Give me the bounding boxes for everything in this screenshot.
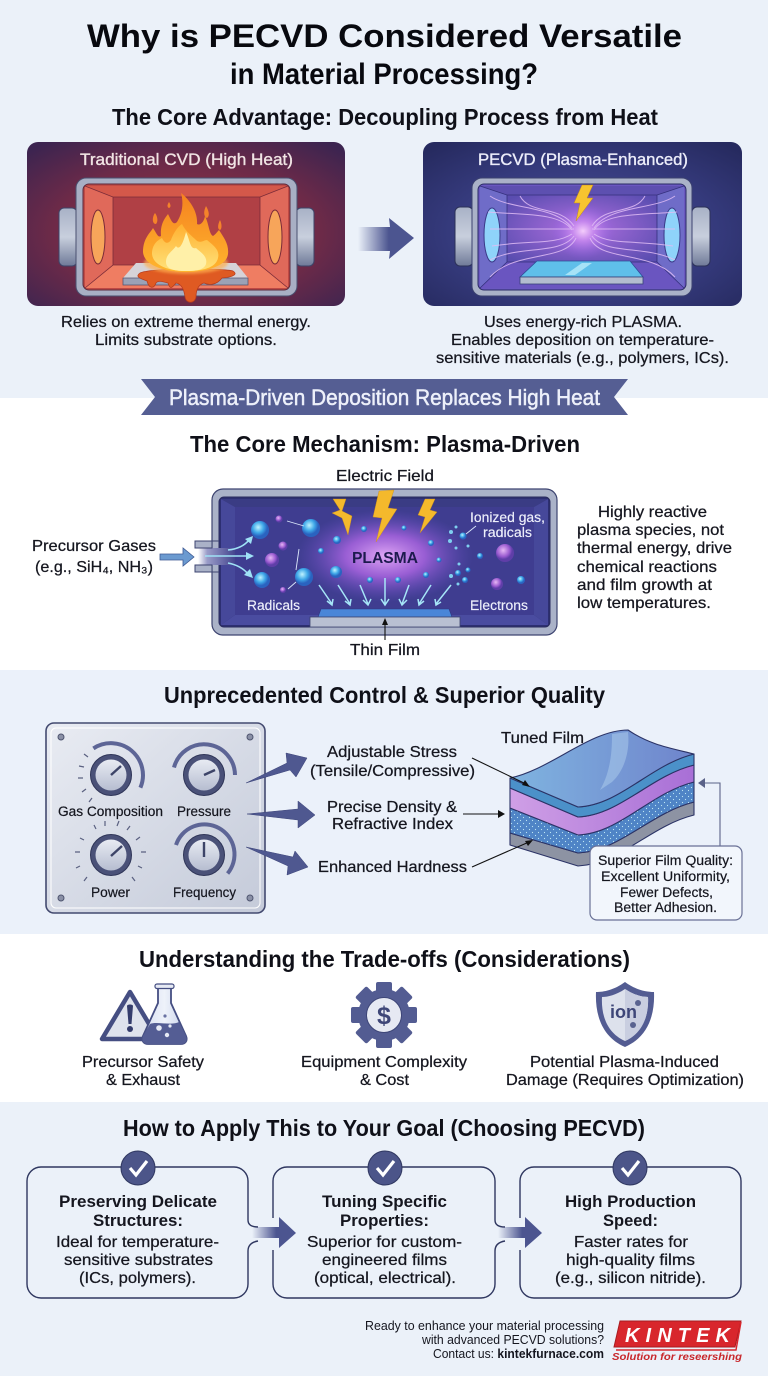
trade-off labels: Precursor Safety bbox=[82, 1054, 204, 1071]
particles bbox=[251, 516, 525, 593]
trade-off labels: & Exhaust bbox=[106, 1072, 181, 1089]
label: tuned film: Tuned Film bbox=[501, 730, 584, 747]
callout: superior film quality bbox=[590, 778, 742, 920]
heading: core mechanism: The Core Mechanism: Plasma-Driven bbox=[190, 431, 580, 457]
card: tuning specific properties: engineered films bbox=[322, 1252, 447, 1269]
footer contact text: Ready to enhance your material processing bbox=[365, 1319, 604, 1333]
text block: plasma species: Highly reactive bbox=[598, 504, 707, 521]
card: high production speed: (e.g., silicon nitride). bbox=[555, 1270, 706, 1287]
knob labels: Power bbox=[91, 885, 131, 900]
inlet opening and pipes bbox=[195, 541, 235, 572]
trade-off labels bbox=[82, 1054, 744, 1089]
label: precursor gases: Precursor Gases bbox=[32, 538, 156, 555]
trade-off labels: Potential Plasma-Induced bbox=[530, 1054, 719, 1071]
icon: flame bbox=[143, 193, 228, 274]
knob: gas composition bbox=[78, 743, 143, 802]
heated chamber bbox=[76, 178, 297, 296]
property labels: Precise Density & bbox=[327, 799, 457, 816]
callout: superior film quality: Superior Film Quality: bbox=[598, 853, 733, 868]
text block: plasma species: chemical reactions bbox=[577, 559, 717, 576]
top surface bbox=[510, 730, 694, 807]
title: in Material Processing? bbox=[230, 58, 538, 91]
card: tuning specific properties: Tuning Specific bbox=[322, 1193, 447, 1211]
text block: plasma species: thermal energy, drive bbox=[577, 540, 732, 557]
chamber flanges bbox=[455, 207, 710, 266]
panel: traditional CVD bbox=[27, 142, 345, 306]
card: preserving delicate structures: Structures: bbox=[93, 1212, 183, 1230]
heading: trade-offs: Understanding the Trade-offs (Considerations) bbox=[139, 946, 630, 972]
card: high production speed: High Production bbox=[565, 1193, 696, 1211]
banner: Plasma-Driven Deposition Replaces High Heat bbox=[169, 385, 600, 410]
card: tuning specific properties: Superior for custom- bbox=[307, 1234, 462, 1251]
icon: lightning bolts bbox=[332, 490, 437, 542]
substrate with melting drips bbox=[123, 263, 248, 302]
inlet flow arrows bbox=[205, 540, 249, 574]
property labels: Adjustable Stress bbox=[327, 744, 457, 761]
caption: PECVD: Uses energy-rich PLASMA. bbox=[484, 314, 682, 331]
caption: PECVD: sensitive materials (e.g., polymers, ICs). bbox=[436, 350, 729, 367]
base layer bbox=[510, 802, 694, 866]
plasma chamber diagram bbox=[195, 489, 557, 635]
card: preserving delicate structures: Preserving Delicate bbox=[59, 1193, 217, 1211]
top layer bbox=[510, 754, 694, 817]
caption: traditional CVD: Limits substrate options. bbox=[95, 332, 277, 349]
card: preserving delicate structures: sensitive substrates bbox=[64, 1252, 213, 1269]
caption: traditional CVD bbox=[61, 314, 311, 349]
plasma field lines bbox=[488, 196, 677, 277]
callout: superior film quality: Fewer Defects, bbox=[620, 885, 713, 900]
heading: apply to goal: How to Apply This to Your Goal (Choosing PECVD) bbox=[123, 1115, 645, 1141]
knob: power bbox=[75, 821, 146, 881]
trade-off labels: Equipment Complexity bbox=[301, 1054, 467, 1071]
property labels: (Tensile/Compressive) bbox=[310, 763, 475, 780]
inlet arrow heads bbox=[244, 536, 254, 578]
text block: plasma species bbox=[577, 504, 732, 612]
icon: lightning bolt bbox=[574, 185, 593, 221]
glass substrate bbox=[520, 261, 643, 284]
knob: pressure bbox=[174, 744, 235, 796]
caption: PECVD bbox=[436, 314, 729, 367]
card: high production speed: Speed: bbox=[603, 1212, 658, 1230]
heading: core advantage: The Core Advantage: Decoupling Process from Heat bbox=[112, 104, 658, 130]
chamber body bbox=[212, 489, 557, 635]
logo: KINTEK bbox=[612, 1321, 743, 1363]
label: ionized gas: Ionized gas, bbox=[470, 510, 545, 525]
knob labels: Frequency bbox=[173, 885, 236, 900]
card: tuning specific properties bbox=[273, 1151, 505, 1298]
panel: control knobs bbox=[46, 723, 265, 913]
icon: warning and flask bbox=[102, 984, 187, 1044]
card: tuning specific properties: (optical, electrical). bbox=[314, 1270, 456, 1287]
property labels: Refractive Index bbox=[332, 816, 453, 833]
caption: traditional CVD: Relies on extreme thermal energy. bbox=[61, 314, 311, 331]
label: electrons: Electrons bbox=[470, 598, 528, 613]
footer contact text: with advanced PECVD solutions? bbox=[421, 1333, 604, 1347]
card: preserving delicate structures: Ideal for temperature- bbox=[56, 1234, 219, 1251]
caption: PECVD: Enables deposition on temperature- bbox=[451, 332, 714, 349]
label: precursor gases: (e.g., SiH₄, NH₃) bbox=[35, 559, 153, 576]
banner bbox=[141, 379, 628, 415]
purple layer bbox=[510, 765, 694, 835]
pointer arrows to film bbox=[463, 758, 533, 867]
text block: plasma species: low temperatures. bbox=[577, 595, 711, 612]
screws bbox=[58, 734, 253, 901]
text block: plasma species: and film growth at bbox=[577, 577, 713, 594]
panel: PECVD bbox=[423, 142, 742, 306]
label: electric field: Electric Field bbox=[336, 468, 434, 485]
footer contact text: Contact us: kintekfurnace.com bbox=[433, 1347, 604, 1361]
title bbox=[87, 18, 682, 91]
arrows: knobs to properties bbox=[246, 753, 315, 875]
arrow: card 1 to 2 bbox=[252, 1217, 296, 1248]
card: high production speed: high-quality films bbox=[566, 1252, 695, 1269]
card: high production speed: Faster rates for bbox=[574, 1234, 689, 1251]
plasma chamber bbox=[472, 178, 692, 296]
property labels: Enhanced Hardness bbox=[318, 859, 467, 876]
logo: KINTEK: KINTEK bbox=[625, 1325, 732, 1347]
logo: KINTEK: Solution for reseershing bbox=[612, 1351, 743, 1363]
arrow: gas inlet bbox=[160, 548, 194, 566]
heading: control and quality: Unprecedented Control & Superior Quality bbox=[164, 682, 605, 708]
title: Why is PECVD Considered Versatile bbox=[87, 18, 682, 54]
label: precursor gases bbox=[32, 538, 156, 576]
icon: ion shield bbox=[596, 982, 654, 1047]
card: tuning specific properties: Properties: bbox=[340, 1212, 429, 1230]
property labels bbox=[310, 744, 475, 876]
knob labels bbox=[58, 804, 236, 900]
trade-off labels: Damage (Requires Optimization) bbox=[506, 1072, 744, 1089]
panel title: traditional CVD: Traditional CVD (High Heat) bbox=[80, 151, 293, 169]
label: ionized gas bbox=[470, 510, 545, 540]
label: ionized gas: radicals bbox=[483, 525, 532, 540]
substrate and film bbox=[310, 609, 460, 627]
label: radicals: Radicals bbox=[247, 598, 300, 613]
icon: gear with dollar bbox=[351, 982, 417, 1048]
card: preserving delicate structures: (ICs, polymers). bbox=[79, 1270, 196, 1287]
knob: frequency bbox=[176, 824, 235, 876]
trade-off labels: & Cost bbox=[360, 1072, 410, 1089]
dotted layer bbox=[510, 782, 694, 853]
callout: superior film quality: Excellent Uniformity, bbox=[601, 869, 730, 884]
tuned film block bbox=[510, 730, 694, 866]
card: high production speed bbox=[520, 1151, 741, 1298]
icon: ion shield: ion bbox=[610, 1002, 637, 1022]
card: preserving delicate structures bbox=[27, 1151, 258, 1298]
arrow: to PECVD bbox=[358, 218, 414, 259]
arrow: card 2 to 3 bbox=[498, 1217, 542, 1248]
panel title: PECVD: PECVD (Plasma-Enhanced) bbox=[478, 151, 688, 169]
footer contact text bbox=[365, 1319, 604, 1361]
PLASMA label: PLASMA bbox=[352, 550, 418, 567]
arrow and label: thin film: Thin Film bbox=[350, 642, 420, 659]
chamber flanges bbox=[59, 208, 314, 266]
knob labels: Gas Composition bbox=[58, 804, 163, 819]
text block: plasma species: plasma species, not bbox=[577, 522, 725, 539]
deposition arrows bbox=[319, 578, 451, 605]
arrow and label: thin film bbox=[350, 618, 420, 659]
callout: superior film quality: Better Adhesion. bbox=[614, 900, 717, 915]
icon: gear with dollar: $ bbox=[377, 1002, 391, 1030]
knob labels: Pressure bbox=[177, 804, 231, 819]
